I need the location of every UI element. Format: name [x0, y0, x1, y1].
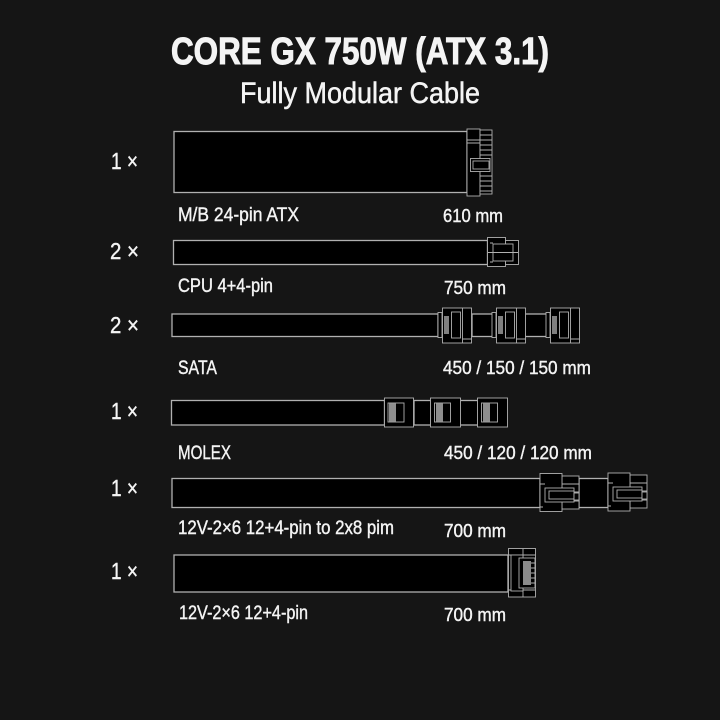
- quantity: 1 ×: [111, 148, 138, 174]
- label: MOLEX: [178, 443, 231, 464]
- quantity: 2 ×: [110, 312, 139, 338]
- quantity: 1 ×: [111, 558, 138, 584]
- length: 450 / 120 / 120 mm: [444, 442, 592, 463]
- row: CPU 4+4-pin: [110, 238, 518, 298]
- cable: [174, 548, 536, 597]
- cable: [172, 308, 580, 343]
- label: 12V-2×6 12+4-pin: [179, 603, 308, 624]
- quantity: 1 ×: [111, 475, 138, 501]
- quantity: 1 ×: [111, 398, 138, 424]
- length: 700 mm: [444, 604, 506, 625]
- subtitle: Fully Modular Cable: [240, 77, 480, 110]
- cable: [172, 398, 508, 427]
- pin cluster: [523, 561, 531, 585]
- row: 12V-2x6: [111, 548, 536, 625]
- connector ridges: [389, 404, 490, 422]
- length: 750 mm: [444, 277, 506, 298]
- quantity: 2 ×: [110, 238, 139, 264]
- cable: [172, 473, 647, 512]
- label: CPU 4+4-pin: [178, 276, 273, 297]
- row: MOLEX: [111, 398, 592, 464]
- row: M/B 24-pin ATX: [111, 129, 503, 226]
- connector ridges: [444, 316, 557, 334]
- row: 12V-2x6 to 2x8: [111, 473, 647, 541]
- row: SATA: [110, 308, 591, 379]
- cable: [174, 129, 492, 196]
- cable: [174, 238, 518, 266]
- label: SATA: [178, 358, 217, 379]
- title: CORE GX 750W (ATX 3.1): [171, 31, 549, 73]
- length: 700 mm: [444, 520, 506, 541]
- length: 610 mm: [443, 205, 503, 226]
- label: M/B 24-pin ATX: [178, 205, 299, 226]
- length: 450 / 150 / 150 mm: [443, 357, 591, 378]
- label: 12V-2×6 12+4-pin to 2x8 pim: [178, 518, 394, 539]
